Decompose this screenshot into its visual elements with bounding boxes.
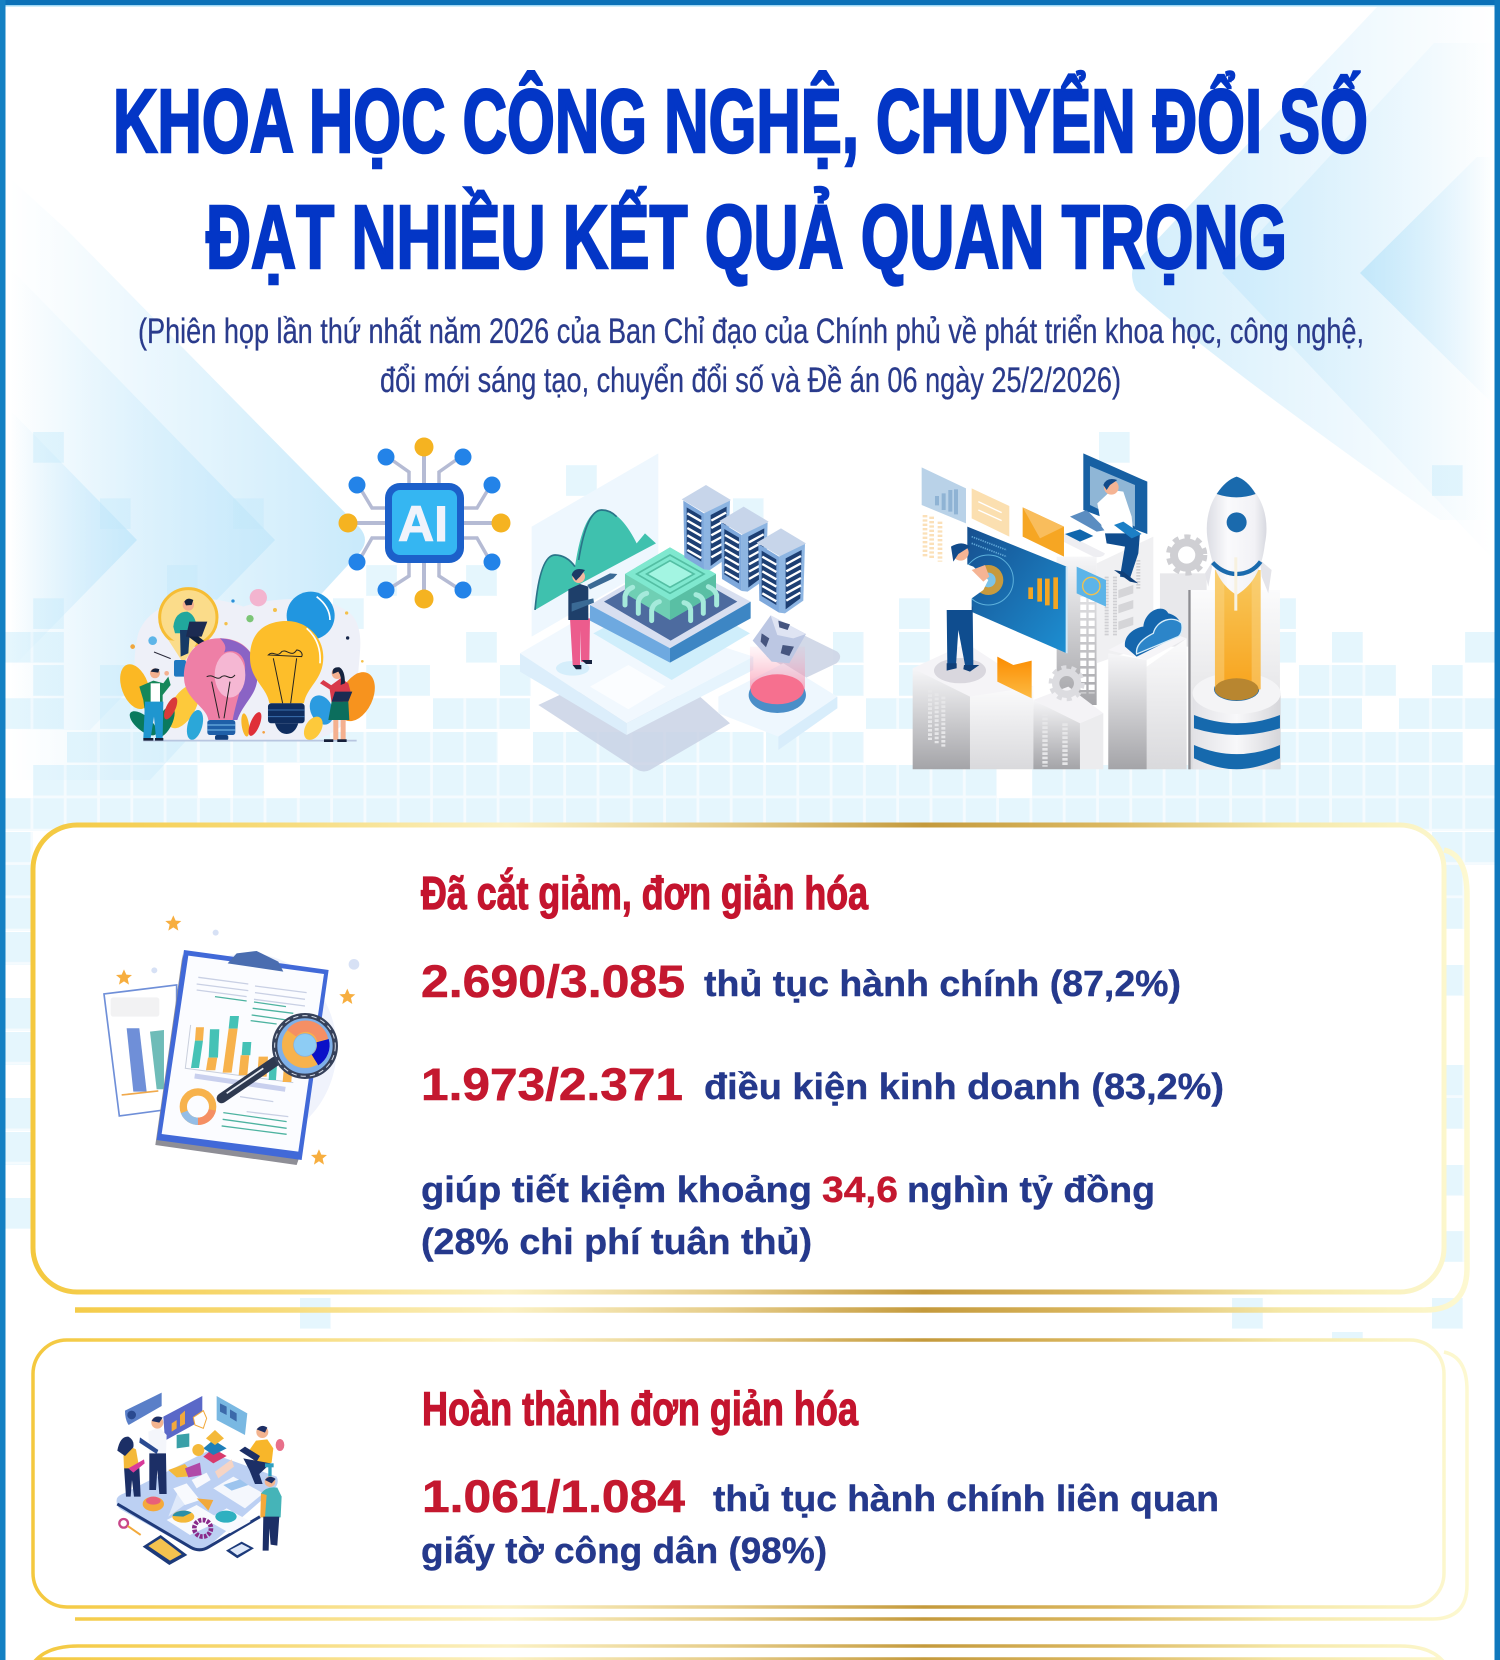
illustration: AI chip platform and servers: [520, 453, 840, 771]
stat: business conditions: [421, 1059, 1224, 1110]
icon: team around digital platform: [117, 1393, 284, 1565]
stat: administrative procedures: 2.690/3.085: [421, 956, 685, 1007]
panel 1: outer gold frame: [75, 850, 1467, 1310]
stat: administrative procedures: thủ tục hành chính (87,2%): [704, 963, 1181, 1004]
panel 3: next panel cut at page edge: [37, 1646, 1441, 1659]
title: [113, 70, 1368, 288]
background: pale pixel tiles: [0, 432, 1498, 1363]
subtitle: đổi mới sáng tạo, chuyển đổi số và Đề án 06 ngày 25/2/2026): [380, 361, 1121, 400]
text: savings: (28% chi phí tuân thủ): [421, 1221, 812, 1262]
panel 1: cut and simplified procedures: [33, 825, 1444, 1292]
icon: AI chip: AI: [398, 496, 448, 552]
text: savings: [421, 1169, 1155, 1262]
text: savings: 34,6: [822, 1169, 898, 1210]
subtitle: [138, 312, 1364, 400]
background: left chevrons: [10, 178, 365, 780]
icon: AI chip: [338, 438, 510, 608]
stat: citizen documents: thủ tục hành chính liên quan: [713, 1478, 1219, 1519]
stat: citizen documents: giấy tờ công dân (98%): [421, 1530, 827, 1571]
heading: panel 2: Hoàn thành đơn giản hóa: [422, 1382, 859, 1435]
background: right chevrons: [1132, 7, 1494, 560]
icon: clipboard with magnifier: [104, 915, 359, 1165]
illustration: light bulbs and people: [114, 589, 382, 743]
panel 2: outer gold frame: [75, 1352, 1467, 1619]
stat: citizen documents: 1.061/1.084: [422, 1471, 685, 1522]
text: savings: nghìn tỷ đồng: [907, 1169, 1155, 1210]
text: savings: giúp tiết kiệm khoảng: [421, 1169, 812, 1210]
heading: panel 1: Đã cắt giảm, đơn giản hóa: [421, 867, 868, 919]
stat: business conditions: điều kiện kinh doanh (83,2%): [704, 1066, 1224, 1107]
illustration: technology city and rocket: [913, 453, 1281, 769]
panel 2: completed simplification: [33, 1340, 1444, 1607]
stat: citizen documents: [421, 1471, 1219, 1571]
stat: business conditions: 1.973/2.371: [421, 1059, 683, 1110]
stat: administrative procedures: [421, 956, 1181, 1007]
